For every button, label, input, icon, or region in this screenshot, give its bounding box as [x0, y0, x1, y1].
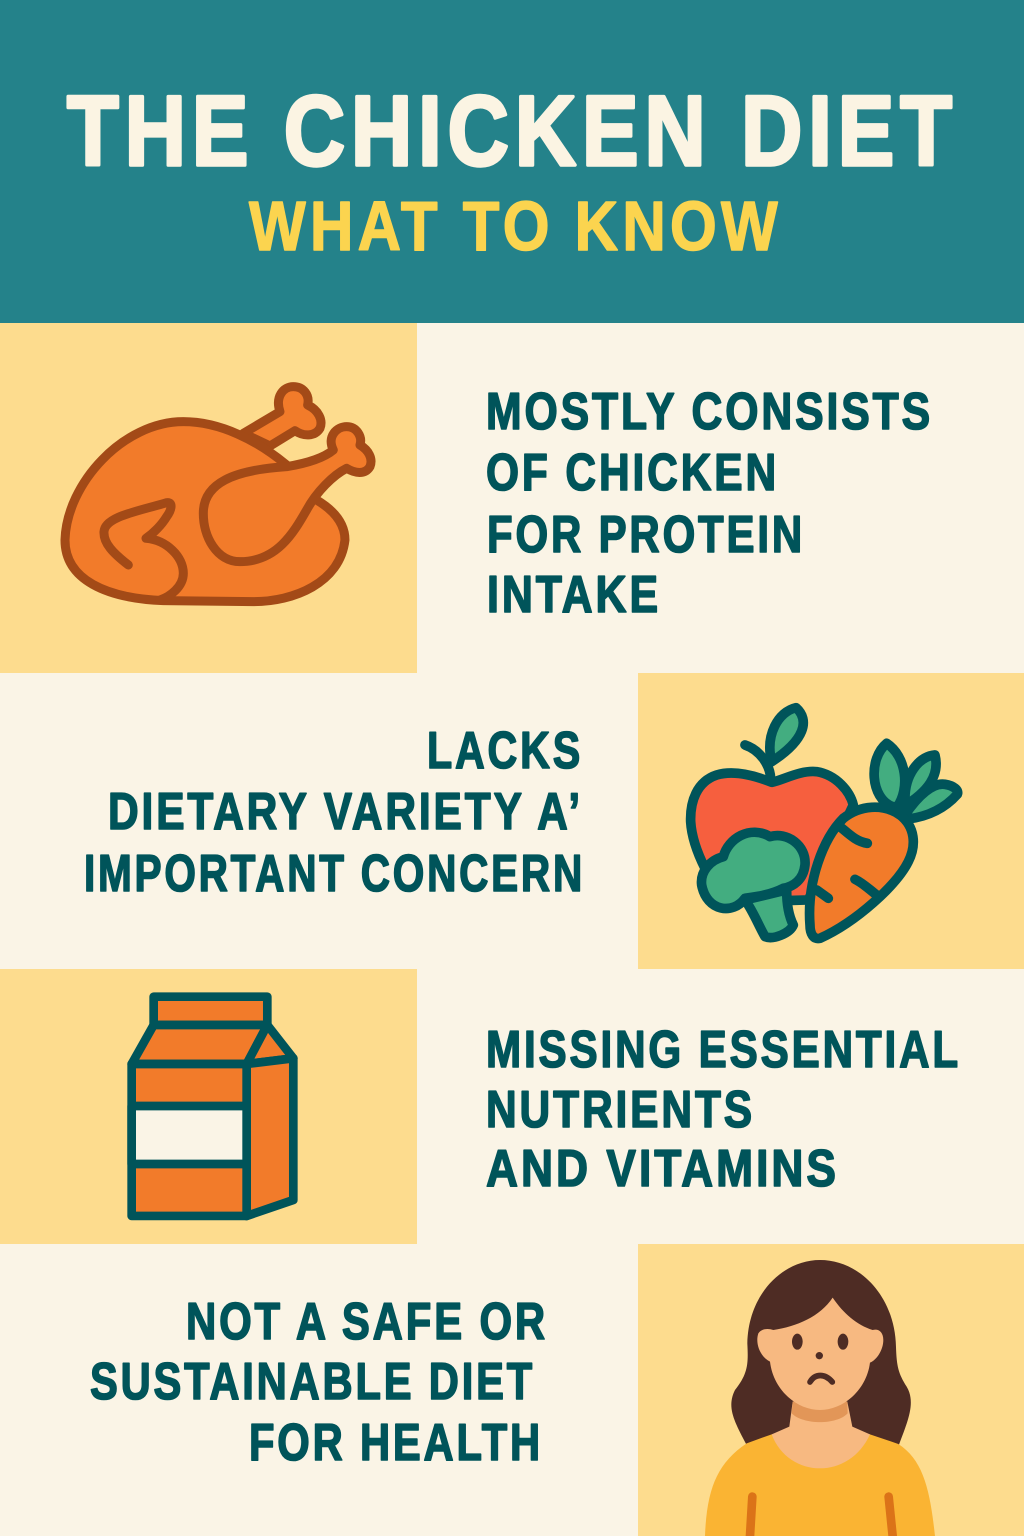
text block: chicken	[486, 383, 933, 624]
icon: apple, broccoli and carrot	[691, 708, 958, 939]
panel: not safe	[90, 1244, 1024, 1536]
text block: variety	[84, 722, 585, 903]
text block: nutrients: NUTRIENTS	[486, 1081, 755, 1139]
text block: chicken: INTAKE	[487, 566, 661, 624]
text block: chicken: OF CHICKEN	[486, 444, 779, 502]
text block: not safe: FOR HEALTH	[249, 1414, 543, 1472]
panel: mostly chicken	[0, 323, 933, 673]
text block: not safe: SUSTAINABLE DIET	[90, 1353, 535, 1411]
text block: not safe: NOT A SAFE OR	[186, 1293, 548, 1351]
text block: variety: LACKS	[427, 722, 583, 780]
text block: variety: DIETARY VARIETY A’	[108, 783, 583, 841]
icon: roast chicken	[65, 387, 371, 602]
icon: milk carton	[132, 997, 293, 1216]
panel: missing nutrients	[0, 969, 961, 1244]
text block: chicken: MOSTLY CONSISTS	[486, 383, 933, 441]
text block: nutrients	[486, 1021, 961, 1198]
text block: chicken: FOR PROTEIN	[487, 506, 805, 564]
panel: lacks variety	[84, 673, 1024, 969]
header banner	[0, 0, 1024, 323]
text block: nutrients: AND VITAMINS	[486, 1140, 839, 1198]
icon: unhappy woman	[705, 1260, 935, 1536]
text block: not safe	[90, 1293, 548, 1472]
subtitle: WHAT TO KNOW	[249, 187, 782, 265]
text block: variety: IMPORTANT CONCERN	[84, 845, 585, 903]
